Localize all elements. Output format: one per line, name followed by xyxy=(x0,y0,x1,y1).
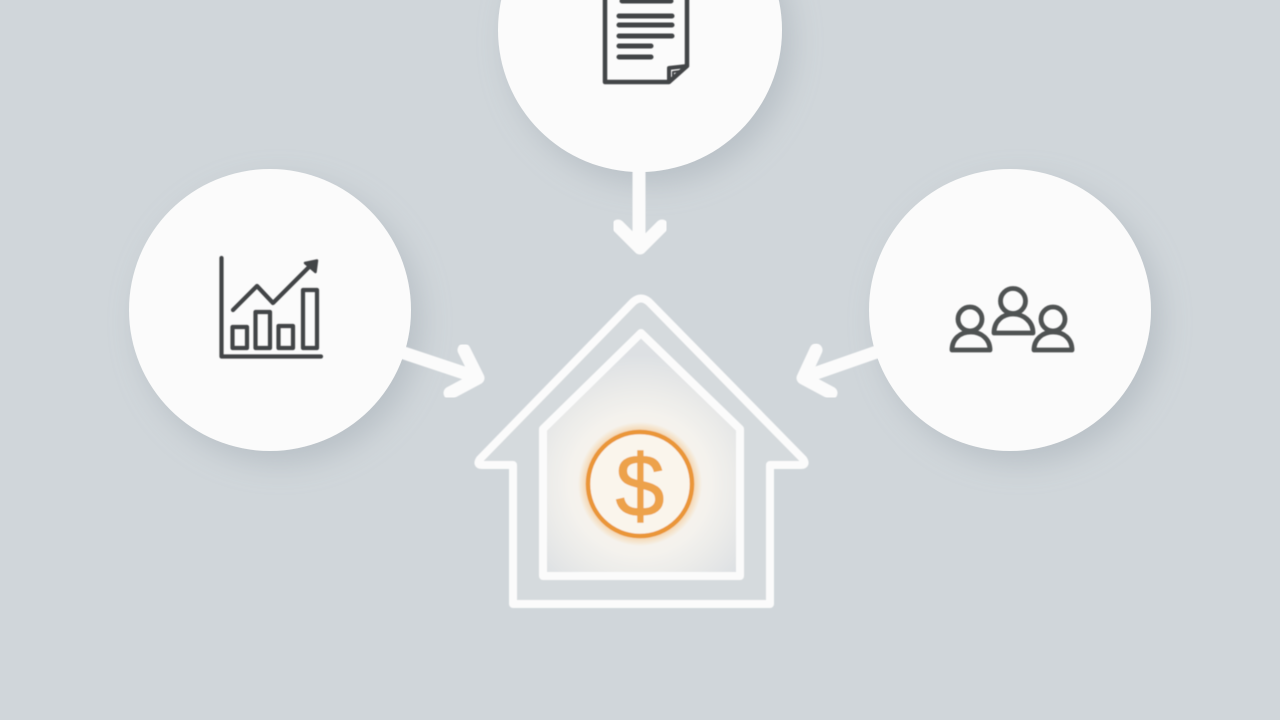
coin xyxy=(578,422,702,546)
house outer outline xyxy=(478,298,805,604)
icon: three people xyxy=(952,288,1072,350)
arrow: top to house xyxy=(618,168,662,248)
dollar sign: $ xyxy=(616,436,664,535)
house xyxy=(478,298,805,604)
panel: top circle with document xyxy=(498,0,782,172)
panel: left circle with chart xyxy=(129,169,411,451)
arrow: left to house xyxy=(392,349,478,393)
arrow: right to house xyxy=(803,348,888,393)
panel: right circle with people xyxy=(869,169,1151,451)
icon: growth chart xyxy=(222,258,321,356)
house inner panel xyxy=(543,333,740,576)
icon: document xyxy=(605,0,687,82)
